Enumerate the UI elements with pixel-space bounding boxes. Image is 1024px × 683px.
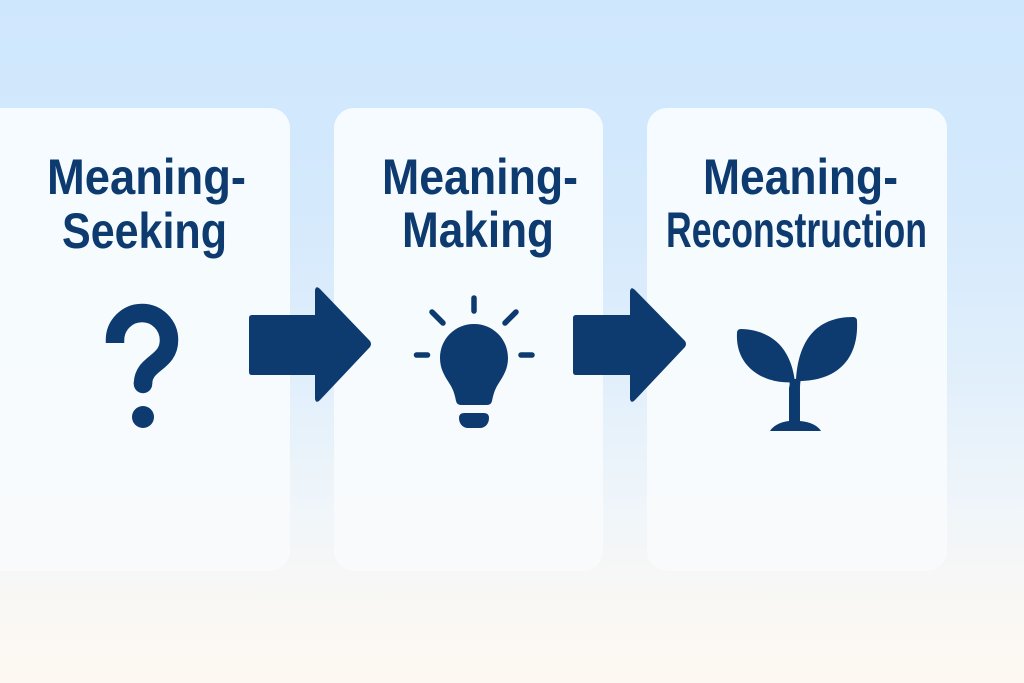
heading: meaning-making: Making — [402, 202, 554, 258]
arrow: seeking to making — [249, 287, 371, 402]
panel: meaning-reconstruction — [647, 108, 947, 571]
card 3 — [647, 108, 947, 571]
card 1 — [0, 108, 290, 571]
heading: meaning-seeking — [47, 149, 246, 259]
icon: sprout — [737, 317, 857, 431]
icon: question mark — [115, 313, 169, 428]
arrow: making to reconstruction — [573, 288, 686, 402]
heading: meaning-seeking: Meaning- — [47, 149, 246, 205]
card 2 — [334, 108, 603, 571]
heading: meaning-making — [382, 149, 578, 258]
panel: meaning-seeking — [0, 108, 290, 571]
panel: meaning-making — [334, 108, 603, 571]
heading: meaning-making: Meaning- — [382, 149, 578, 205]
icon: light bulb — [416, 298, 532, 428]
heading: meaning-seeking: Seeking — [62, 203, 227, 259]
heading: meaning-reconstruction: Meaning- — [703, 149, 898, 205]
heading: meaning-reconstruction — [666, 149, 927, 258]
heading: meaning-reconstruction: Reconstruction — [666, 202, 927, 258]
